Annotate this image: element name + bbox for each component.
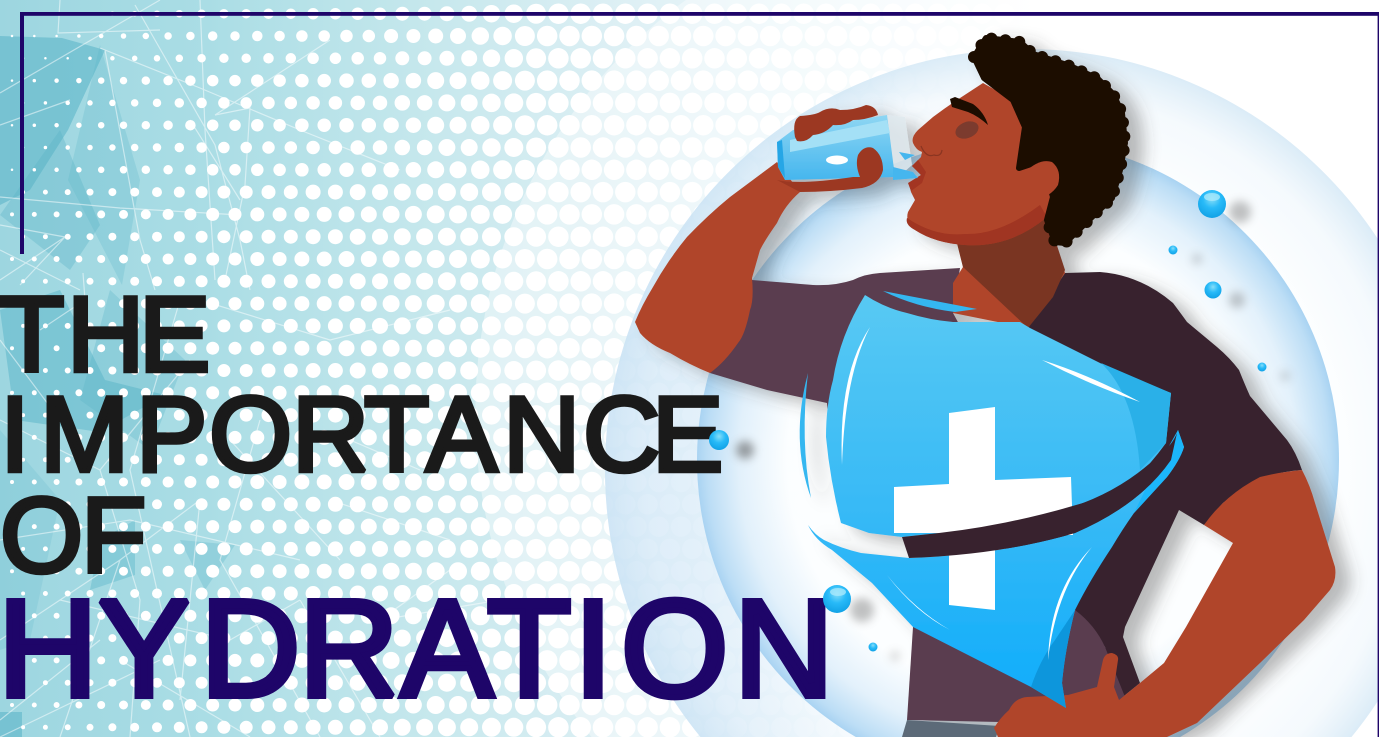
title line: HYDRATION: HYDRATION [0,572,834,726]
droplet small 1 [1168,246,1202,264]
outer water ring [605,49,1379,737]
shield collar swoosh [883,291,977,312]
neck shade [957,215,1065,328]
shirt strip across shield [902,433,1177,558]
ear [1020,161,1059,198]
network lines [0,0,500,737]
shield: blue water shield with cross [808,295,1184,708]
droplet beside title [709,430,754,459]
water splash [899,152,915,160]
droplet medium [1204,282,1245,308]
water reflection [826,156,848,164]
droplet near N [823,585,874,622]
shirt light front [710,268,1000,520]
shield body lower swoosh [808,430,1184,708]
title line: OF: OF [0,475,146,595]
glass transparent rim [887,115,912,180]
hair [974,38,1125,243]
nose line [921,146,942,156]
shirt lower front [907,600,1125,722]
faint outer halo circle [475,0,1379,737]
droplet small 2 [1258,362,1290,381]
shield lower facet [1031,610,1075,708]
lips [908,160,926,191]
shield body upper [826,295,1171,537]
shield highlights [842,327,1140,660]
fingers over glass [794,105,878,141]
head [907,83,1055,245]
shirt dark side [1000,272,1302,700]
title line: IMPORTANCE: IMPORTANCE [0,374,723,494]
neck light [953,215,1065,328]
droplet top right large [1198,190,1251,223]
low-poly teal shards [0,36,235,737]
shield bright right patch [1134,430,1184,513]
right arm and hand [994,470,1335,737]
shield right facet [1101,363,1171,470]
hand gripping glass [777,147,883,192]
outer ring left tint [605,49,1379,737]
halftone dot field [12,14,1004,737]
glass of water [777,115,918,180]
title line: THE: THE [0,274,210,394]
water stream [893,167,918,180]
droplet small 3 [868,642,900,661]
white cross [894,407,1073,610]
glass base [777,140,785,178]
glass body [777,115,895,180]
jaw shading [907,205,1047,245]
raised arm [635,162,800,373]
figure: man drinking water [635,38,1335,737]
glass highlight [790,120,890,152]
inner water bubble [697,139,1339,737]
shield crescent left [800,373,811,498]
title [0,274,834,726]
closed eye [953,118,981,142]
eyebrow [950,97,988,125]
water droplets [709,190,1290,661]
trousers [902,720,1000,737]
